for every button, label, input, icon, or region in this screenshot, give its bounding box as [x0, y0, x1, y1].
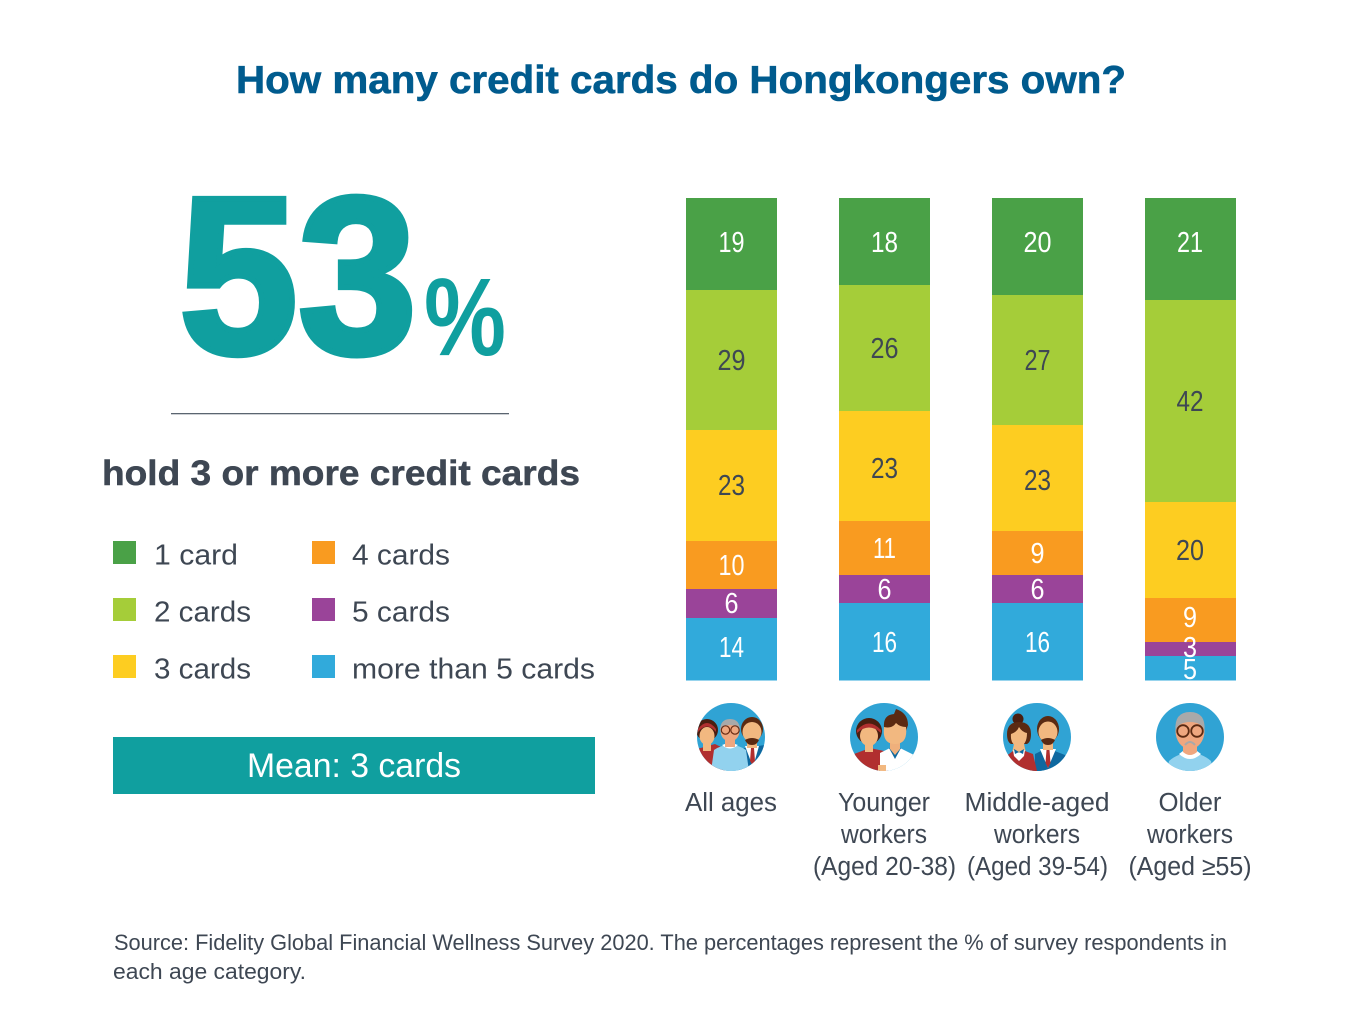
legend	[113, 540, 595, 686]
stacked bar: middle-aged workers: 23	[1024, 465, 1051, 497]
caption: younger workers: Younger	[838, 789, 930, 817]
stacked bar: younger workers: 18	[871, 227, 898, 259]
caption: older workers: workers	[1146, 821, 1233, 849]
legend item: 1 card	[113, 540, 238, 572]
stacked bar: older workers	[1145, 198, 1236, 686]
caption: older workers	[1128, 789, 1252, 881]
caption: middle-aged workers	[964, 789, 1110, 881]
caption: all ages: All ages	[685, 789, 777, 817]
legend item: 3 cards	[113, 654, 251, 686]
stacked bar: middle-aged workers: 20	[1024, 227, 1052, 259]
stacked bar: all ages: 23	[718, 470, 745, 502]
stacked bar: younger workers: 11	[873, 533, 896, 565]
stacked bar: middle-aged workers	[992, 198, 1083, 680]
stacked bar: older workers: 9	[1183, 602, 1197, 634]
stacked bar: all ages: 19	[718, 227, 744, 259]
icon: middle-aged workers	[1003, 703, 1071, 771]
caption: middle-aged workers: (Aged 39-54)	[967, 853, 1108, 881]
caption: younger workers: (Aged 20-38)	[813, 853, 956, 881]
stacked bar: all ages: 14	[719, 632, 744, 664]
caption: younger workers: workers	[840, 821, 927, 849]
legend item: 5 cards	[312, 596, 450, 628]
mean callout	[113, 737, 595, 794]
icon: younger workers	[850, 703, 918, 773]
legend item: 2 cards	[113, 596, 251, 628]
caption: middle-aged workers: workers	[993, 821, 1080, 849]
caption: older workers: Older	[1158, 789, 1222, 817]
title: How many credit cards do Hongkongers own?	[236, 59, 1126, 102]
stacked bar: all ages: 6	[724, 588, 738, 620]
stacked bar: middle-aged workers: 6	[1030, 574, 1044, 606]
big statistic: 53%: %	[424, 256, 506, 379]
source note: each age category.	[113, 959, 306, 984]
legend item: 2 cards: 2 cards	[154, 596, 251, 628]
stacked bar: all ages: 29	[718, 345, 746, 377]
caption: middle-aged workers: Middle-aged	[964, 789, 1110, 817]
big statistic: 53%: 53	[179, 151, 417, 401]
caption: younger workers	[813, 789, 956, 881]
stacked bar: older workers: 5	[1183, 654, 1197, 686]
stacked bar: all ages: 10	[718, 550, 744, 582]
stacked bar: older workers: 42	[1176, 386, 1204, 418]
legend item: 3 cards: 3 cards	[154, 654, 251, 686]
icon: all ages group	[696, 703, 765, 771]
stacked bar: middle-aged workers: 27	[1024, 345, 1050, 377]
legend item: 4 cards: 4 cards	[352, 540, 450, 572]
source note	[113, 930, 1227, 984]
stacked bar: older workers: 3	[1183, 632, 1197, 664]
stacked bar: younger workers: 23	[871, 453, 898, 485]
stacked bar: all ages	[686, 198, 777, 680]
icon: older workers	[1156, 703, 1224, 771]
stacked bar: younger workers: 16	[872, 627, 897, 659]
legend item: 1 card: 1 card	[154, 540, 238, 572]
stacked bar: younger workers	[839, 198, 930, 680]
stacked bar: younger workers: 26	[870, 333, 898, 365]
stacked bar: older workers: 20	[1176, 535, 1204, 567]
stacked bar: younger workers: 6	[878, 574, 892, 606]
caption: older workers: (Aged ≥55)	[1128, 853, 1252, 881]
stacked bar: middle-aged workers: 16	[1025, 627, 1050, 659]
stacked bar: middle-aged workers: 9	[1030, 538, 1044, 570]
source note: Source: Fidelity Global Financial Wellness Survey 2020. The percentages represent the % of survey respondents in	[114, 930, 1227, 955]
legend item: 4 cards	[312, 540, 450, 572]
mean callout: Mean: 3 cards	[247, 747, 461, 785]
legend item: more than 5 cards: more than 5 cards	[352, 654, 595, 686]
subheading: hold 3 or more credit cards	[102, 454, 580, 493]
stacked bar: older workers: 21	[1177, 227, 1203, 259]
legend item: 5 cards: 5 cards	[352, 596, 450, 628]
